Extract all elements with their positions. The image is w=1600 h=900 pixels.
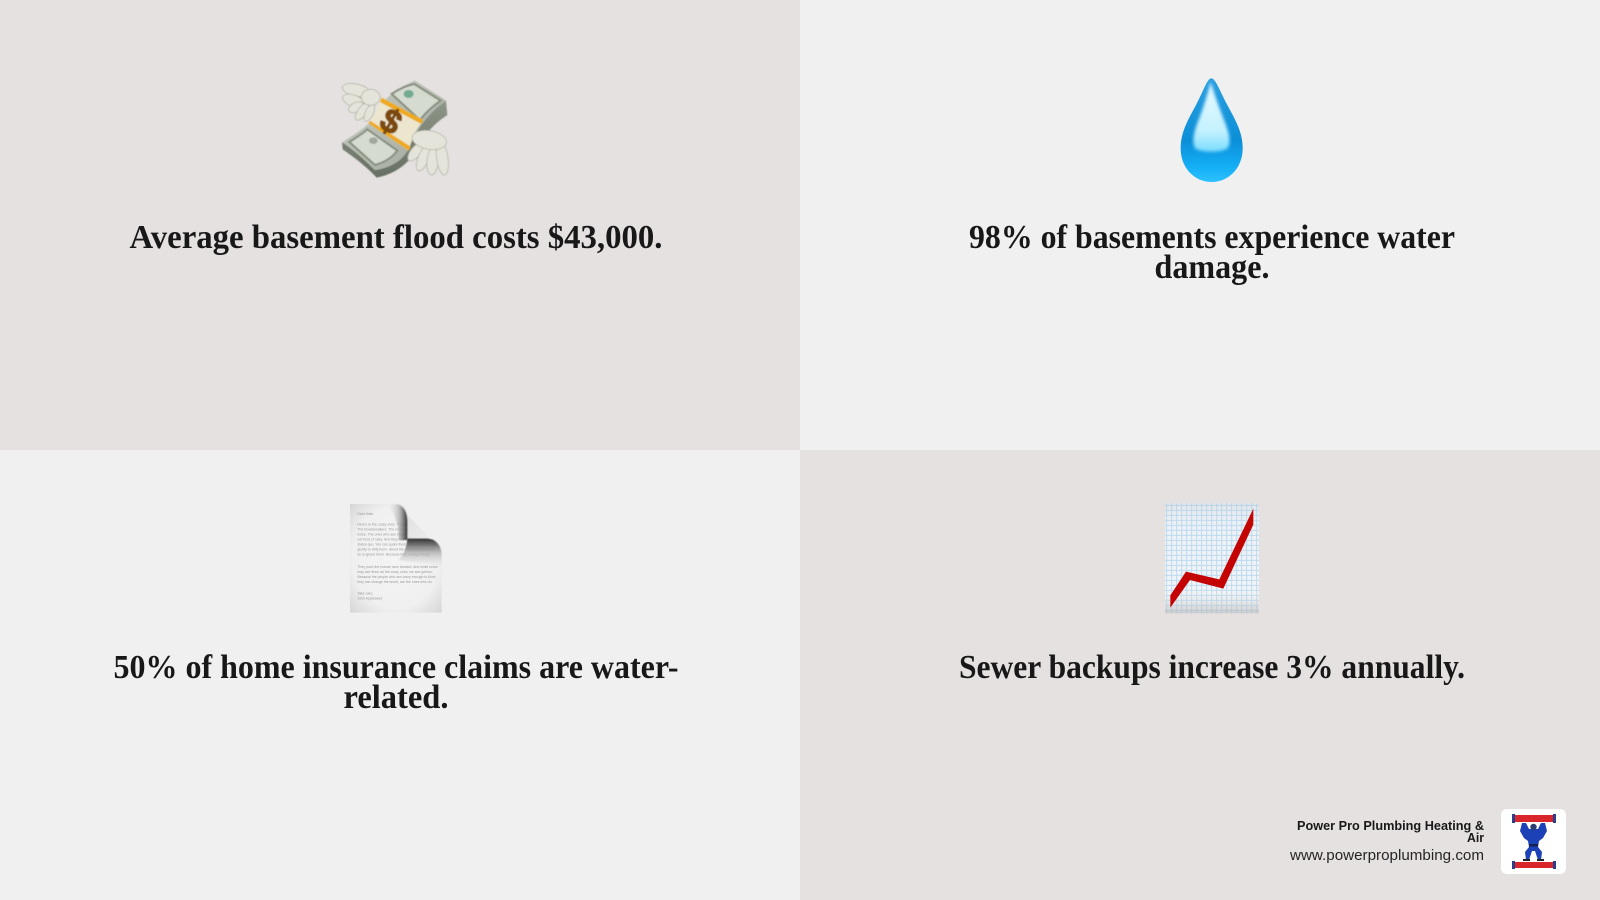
heading: insurance claims: related. (344, 679, 448, 716)
brand: company name and website: Power Pro Plumbing Heating & (1297, 818, 1484, 833)
icon: money with wings (341, 81, 450, 178)
icon: document with curled corner: Dear Kate, (357, 512, 374, 516)
right wing (405, 128, 450, 176)
icon: document with curled corner: Here's to the crazy ones. The misfits. The rebels. (357, 523, 433, 527)
icon: rising chart (1165, 503, 1259, 613)
heading: water damage: 98% of basements experience water (969, 219, 1455, 256)
icon: document with curled corner: glorify or vilify them. About the only thing you can't (357, 548, 435, 552)
icon: document with curled corner (350, 504, 442, 613)
icon: document with curled corner: John Appleseed (357, 597, 382, 601)
icon: document with curled corner: not fond of rules. And they have no respect for the (357, 538, 434, 542)
heading: water damage (969, 219, 1455, 286)
heading: water damage: damage. (1154, 249, 1270, 286)
icon: money with wings: $ (373, 101, 408, 143)
icon: document with curled corner: status quo. You can quote them, disagree with them, (357, 543, 438, 547)
icon: document with curled corner: holes. The ones who see things differently. They're (357, 533, 435, 537)
panel: sewer backups (800, 450, 1600, 900)
icon: document with curled corner: They push the human race forward. And while some (357, 565, 438, 569)
icon: document with curled corner: they can change the world, are the ones who do. (357, 580, 433, 584)
brand: company name and website (1289, 818, 1484, 864)
panel: water damage (800, 0, 1600, 450)
icon: document with curled corner: Take care, (357, 591, 373, 595)
panel: flood cost (0, 0, 800, 450)
icon: water drop (1181, 78, 1243, 182)
left wing (341, 81, 380, 123)
brand: company name and website: www.powerproplumbing.com (1289, 847, 1484, 864)
brand: company name and website: Air (1467, 830, 1484, 845)
logo: plumber lifting pipe (1501, 809, 1566, 874)
icon: document with curled corner: may see them as the crazy ones, we see genius. (357, 570, 433, 574)
heading: flood cost: Average basement flood costs $43,000. (130, 219, 662, 256)
icon: document with curled corner: do is ignore them. Because they change things. (357, 553, 431, 557)
heading: insurance claims: 50% of home insurance claims are water- (114, 649, 678, 686)
heading: insurance claims (114, 649, 678, 716)
heading: sewer backups: Sewer backups increase 3% annually. (959, 649, 1465, 686)
icon: document with curled corner: The troublemakers. The round pegs in the square (357, 528, 434, 532)
panel: insurance claims (114, 504, 678, 708)
icon: document with curled corner: Because the people who are crazy enough to think (357, 575, 436, 579)
